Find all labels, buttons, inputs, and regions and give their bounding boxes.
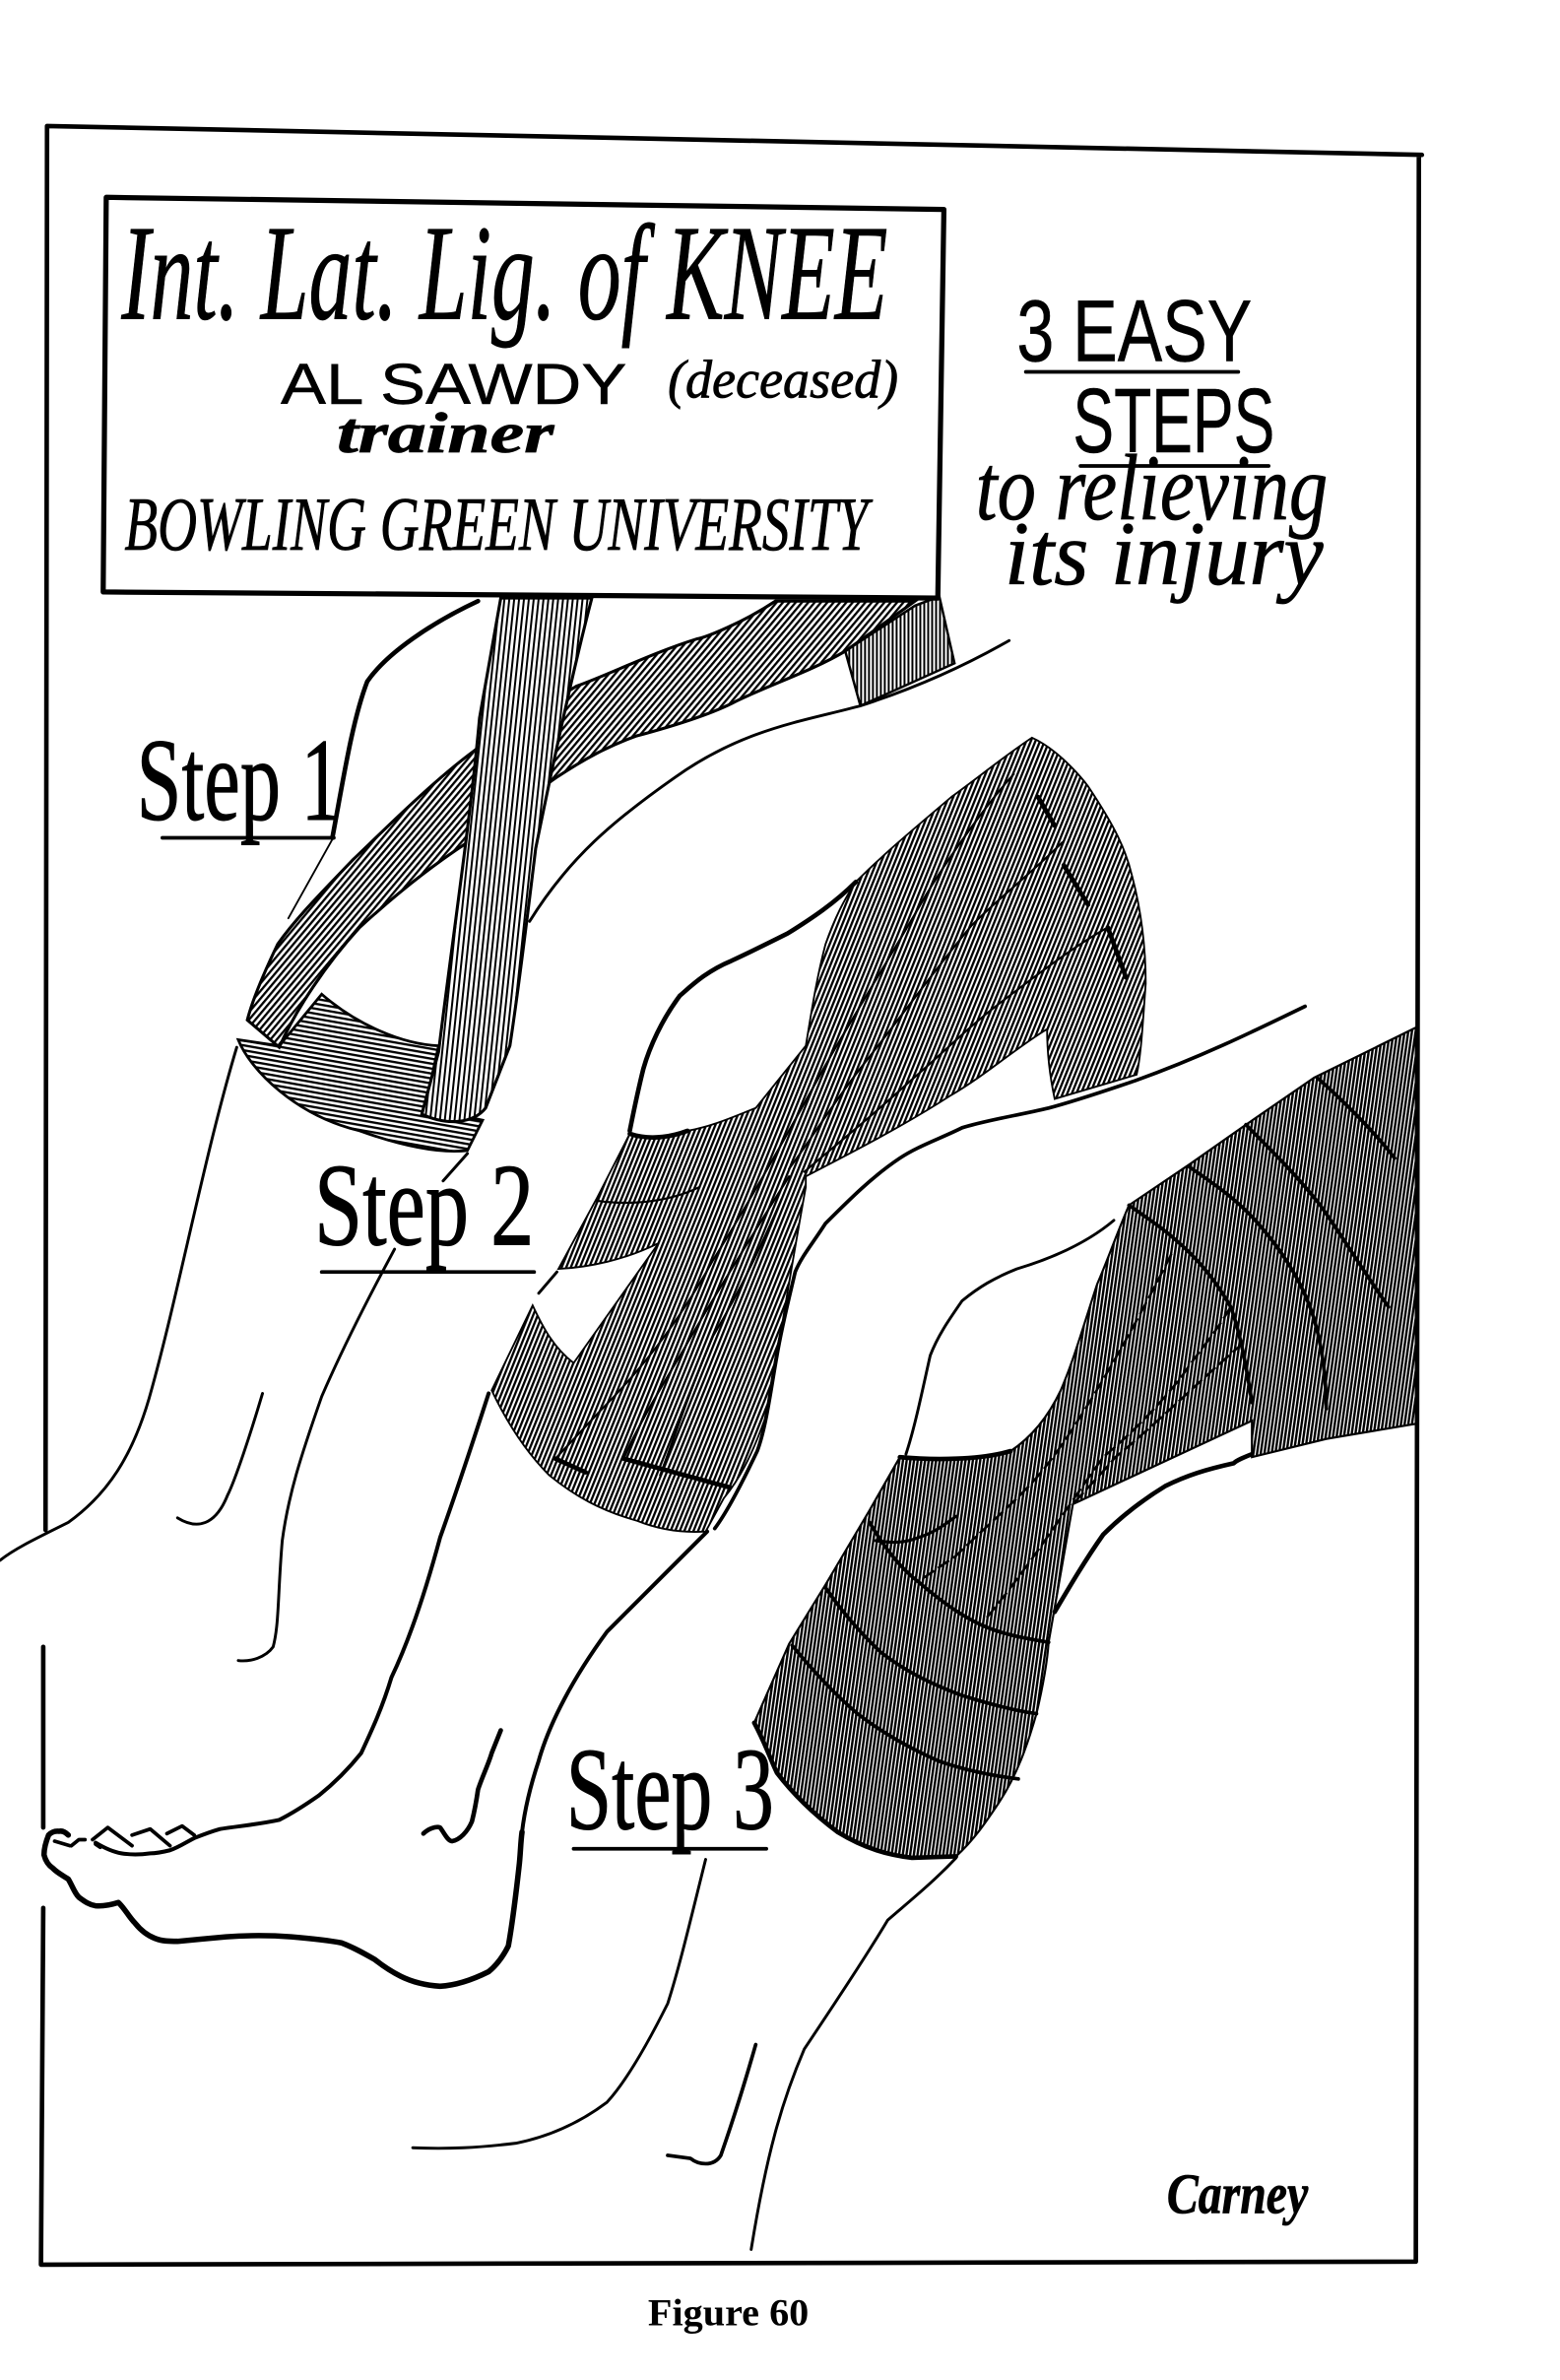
headline: 3 easy steps: [976, 282, 1328, 604]
headline: 3 easy steps: 3 EASY: [1016, 282, 1252, 380]
wrap strip lines: step 2: [555, 774, 1126, 1488]
knee wrap: step 2: [491, 738, 1145, 1532]
foot toes: step 2: [54, 1826, 194, 1847]
title: ligament name: Int. Lat. Lig. of KNEE: [121, 197, 887, 349]
foot top line: step 2: [96, 1393, 488, 1854]
step 3 leg and bandage: [413, 1007, 1416, 2249]
step 2 leg and tape: [44, 738, 1145, 1986]
caption: Figure 60: [648, 2292, 809, 2335]
headline: 3 easy steps: STEPS: [1072, 369, 1274, 472]
title panel: [103, 197, 943, 598]
headline: 3 easy steps: to relieving: [976, 435, 1328, 540]
note: deceased: (deceased): [668, 350, 898, 410]
label: step 3: Step 3: [566, 1724, 774, 1855]
label: step 1: Step 1: [137, 714, 342, 845]
tape: upper right anchor: [845, 597, 954, 705]
label: step 2: Step 2: [314, 1139, 534, 1270]
author name: AL SAWDY: [281, 353, 626, 417]
leg outline: step 1: [0, 601, 1009, 1560]
leg outline: step 3: [413, 1007, 1305, 2249]
bandage: step 3: [754, 1027, 1416, 1858]
foot sole and heel: step 2: [44, 1831, 522, 1986]
page frame: [41, 126, 1422, 2265]
artist signature: Carney: [1167, 2162, 1309, 2226]
leg outline: step 2: [44, 882, 856, 1986]
tape: horizontal anchor strip: [238, 994, 483, 1152]
tape: vertical strip: [422, 598, 592, 1122]
role: trainer: trainer: [337, 401, 555, 465]
step 1 leg and tape: [0, 597, 1009, 1560]
headline: 3 easy steps: its injury: [1005, 503, 1325, 604]
bandage wraps: step 3: [754, 1078, 1395, 1858]
institution: BOWLING GREEN UNIVERSITY: [124, 482, 873, 566]
tape: diagonal strip: [247, 601, 915, 1047]
